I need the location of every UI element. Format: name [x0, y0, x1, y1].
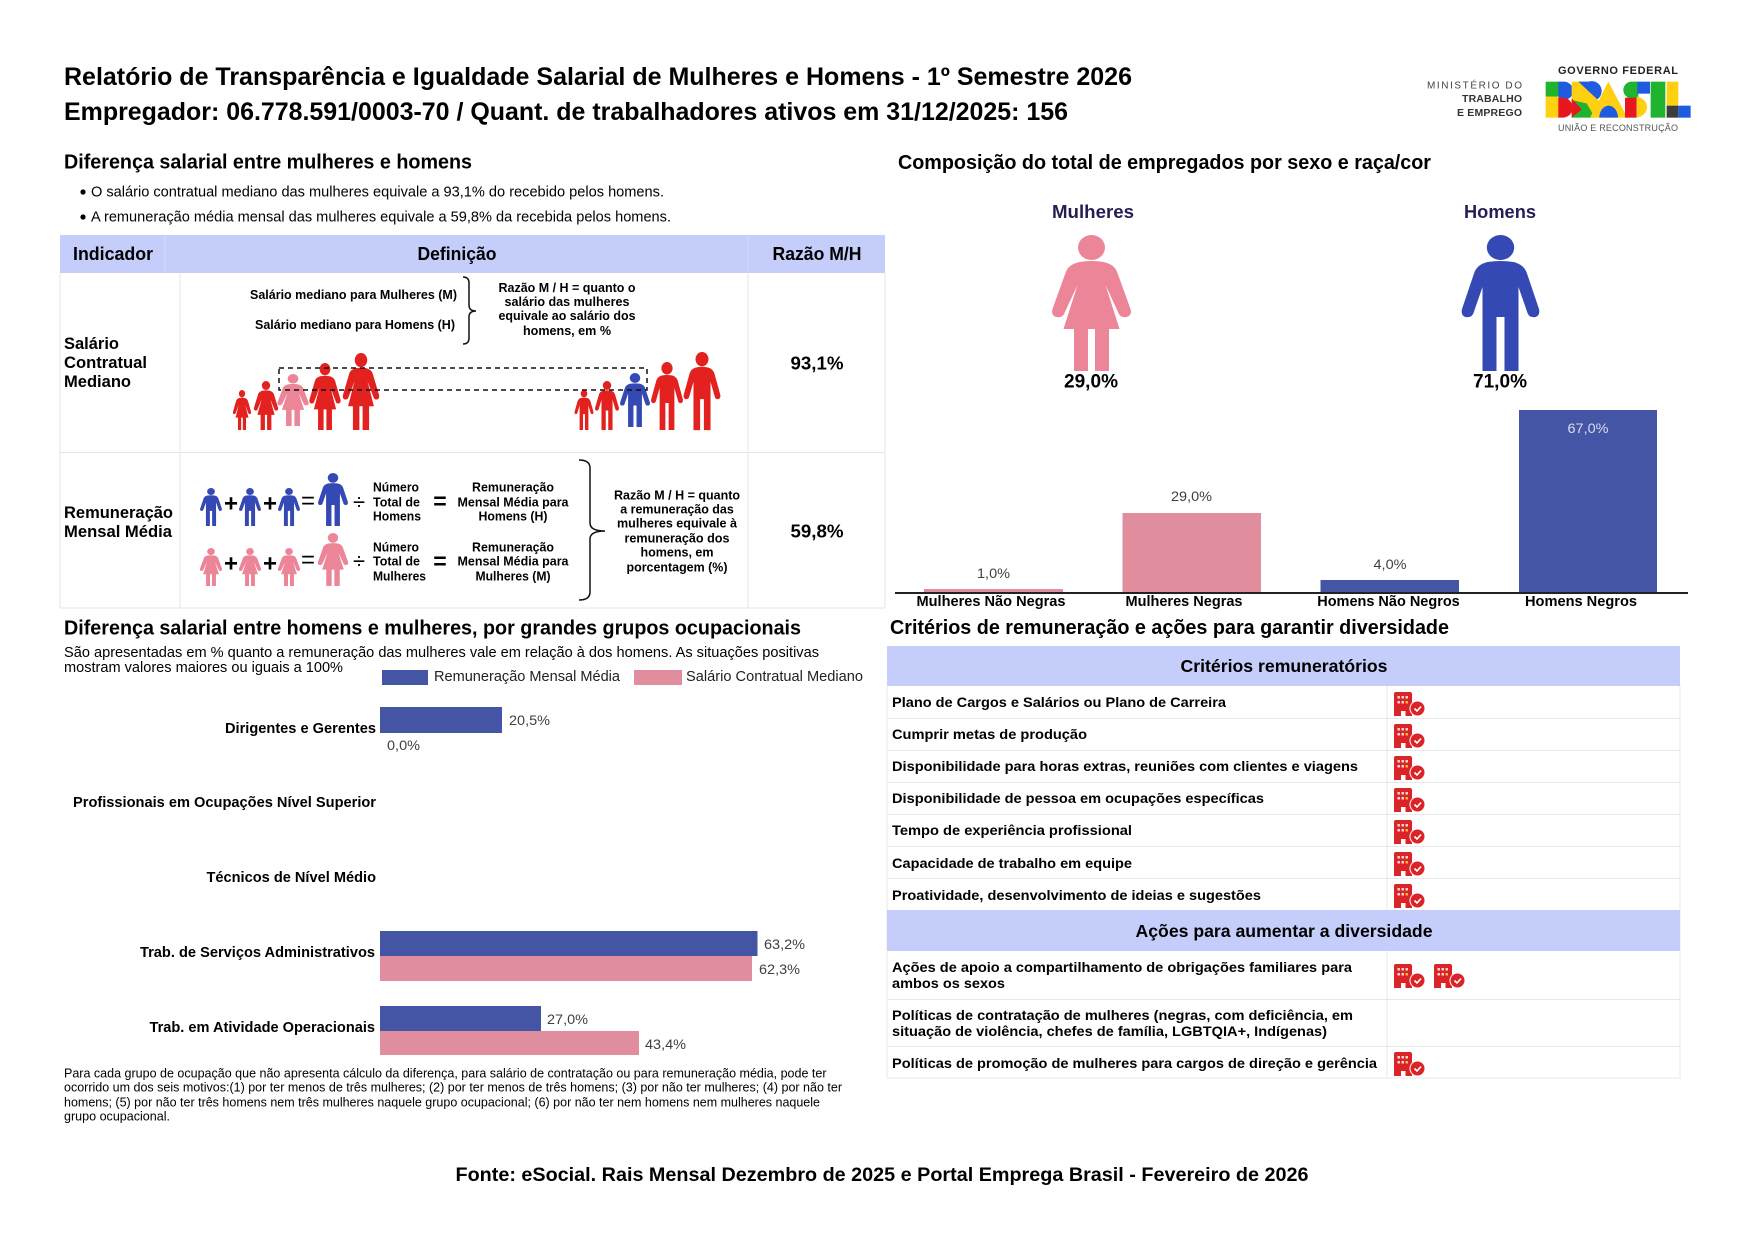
panel: mulheres [1052, 202, 1134, 392]
header: critérios remuneratórios: Critérios remuneratórios [1180, 656, 1388, 676]
text block: explicação: mostram valores maiores ou iguais a 100% [64, 660, 343, 676]
heading: composição: Composição do total de empregados por sexo e raça/cor [898, 152, 1431, 174]
row: salário contratual mediano: Salário mediano para Homens (H) [255, 318, 455, 332]
row: salário contratual mediano: Mediano [64, 373, 131, 391]
legend: Remuneração Mensal Média [434, 669, 621, 685]
formula: homens: Homens (H) [478, 508, 548, 524]
logo: ministério e governo federal: GOVERNO FEDERAL [1558, 65, 1678, 77]
row: ocupações específicas: Disponibilidade de pessoa em ocupações específicas [892, 790, 1264, 806]
formula: mulheres: Mensal Média para [458, 554, 569, 568]
formula: homens: Homens [373, 508, 421, 524]
formula: mulheres: Total de [373, 554, 420, 568]
text block: nota de rodapé: homens; (5) por não ter três homens nem três mulheres naquele grupo ocupacional; (6) por não ter nem homens nem mulheres naquele [64, 1094, 820, 1110]
formula: mulheres [200, 533, 569, 586]
header: ações para aumentar a diversidade: Ações para aumentar a diversidade [1136, 921, 1433, 941]
group: dirigentes e gerentes [225, 707, 550, 753]
row: remuneração mensal média [64, 460, 844, 600]
formula: mulheres: = [301, 546, 315, 574]
source line: Fonte: eSocial. Rais Mensal Dezembro de 2025 e Portal Emprega Brasil - Fevereiro de 2026 [456, 1164, 1309, 1186]
table header: Razão M/H [772, 244, 862, 264]
formula: mulheres: Remuneração [472, 540, 554, 554]
title [64, 63, 1132, 126]
row: metas: Cumprir metas de produção [892, 726, 1087, 742]
row: horas extras [892, 756, 1425, 780]
row: compartilhamento: Ações de apoio a compartilhamento de obrigações familiares para [892, 959, 1352, 975]
bullet list: resumo: O salário contratual mediano das mulheres equivale a 93,1% do recebido pelos homens. [91, 184, 664, 200]
formula: mulheres: + [224, 550, 238, 578]
formula: mulheres: ÷ [353, 548, 365, 574]
row: salário contratual mediano: Salário mediano para Mulheres (M) [250, 288, 457, 302]
panel: mulheres: 29,0% [1064, 372, 1118, 392]
row: plano de cargos [892, 692, 1425, 716]
bar chart: sexo e raça/cor: 4,0% [1374, 556, 1406, 572]
title: Relatório de Transparência e Igualdade Salarial de Mulheres e Homens - 1º Semestre 2026 [64, 63, 1132, 91]
row: salário contratual mediano: salário das mulheres [504, 295, 630, 309]
row: experiência: Tempo de experiência profissional [892, 822, 1132, 838]
row: remuneração mensal média: a remuneração das [620, 502, 734, 516]
row: equipe: Capacidade de trabalho em equipe [892, 855, 1132, 871]
group: atividade operacional: Trab. em Atividade Operacionais [150, 1020, 375, 1036]
row: remuneração mensal média: homens, em [640, 544, 714, 560]
legend: Salário Contratual Mediano [686, 669, 863, 685]
row: promoção: Políticas de promoção de mulheres para cargos de direção e gerência [892, 1055, 1377, 1071]
bar chart: sexo e raça/cor: Mulheres Não Negras [916, 594, 1066, 610]
row: remuneração mensal média: mulheres equivale à [617, 516, 738, 530]
bar chart: sexo e raça/cor: 67,0% [1568, 420, 1608, 436]
formula: homens [200, 473, 569, 526]
group: serviços administrativos: 63,2% [764, 936, 805, 952]
row: proatividade [892, 884, 1425, 908]
formula: mulheres: Mulheres [373, 568, 426, 584]
panel: homens: Homens [1464, 202, 1536, 222]
row: experiência [892, 820, 1425, 844]
row: remuneração mensal média: Remuneração [64, 504, 173, 522]
formula: mulheres: + [263, 550, 277, 578]
group: atividade operacional: 43,4% [645, 1036, 686, 1052]
bullet list: resumo [80, 184, 671, 226]
row: remuneração mensal média: porcentagem (%) [626, 560, 728, 574]
row: salário contratual mediano [64, 277, 844, 430]
row: ocupações específicas [892, 788, 1425, 812]
panel: homens: 71,0% [1473, 372, 1527, 392]
heading: diferença salarial: Diferença salarial entre mulheres e homens [64, 152, 472, 174]
formula: mulheres: Mulheres (M) [476, 568, 550, 584]
formula: homens: Remuneração [472, 480, 554, 494]
group: técnicos: Técnicos de Nível Médio [206, 870, 376, 886]
row: contratação: situação de violência, chefes de família, LGBTQIA+, Indígenas) [892, 1023, 1327, 1039]
formula: homens: = [301, 488, 315, 514]
row: plano de cargos: Plano de Cargos e Salários ou Plano de Carreira [892, 694, 1226, 710]
bar chart: sexo e raça/cor: 29,0% [1171, 488, 1212, 504]
formula: homens: = [433, 488, 447, 514]
text block: nota de rodapé: Para cada grupo de ocupação que não apresenta cálculo da diferença, para salário de contratação ou para remuneração média, pode ter [64, 1066, 827, 1080]
row: equipe [892, 852, 1425, 876]
heading: grupos ocupacionais: Diferença salarial entre homens e mulheres, por grandes grupos ocupacionais [64, 618, 801, 640]
group: atividade operacional [150, 1006, 686, 1055]
text block: nota de rodapé: ocorrido um dos seis motivos:(1) por ter menos de três mulheres; (2) por ter menos de três homens; (3) por não ter mulheres; (4) por não ter [64, 1080, 843, 1094]
logo: ministério e governo federal: MINISTÉRIO DO [1427, 78, 1522, 92]
text block: nota de rodapé [64, 1066, 843, 1124]
table header: Indicador [73, 244, 153, 264]
group: serviços administrativos: Trab. de Serviços Administrativos [140, 945, 375, 961]
title: Empregador: 06.778.591/0003-70 / Quant. de trabalhadores ativos em 31/12/2025: 156 [64, 98, 1068, 126]
group: dirigentes e gerentes: 0,0% [387, 737, 420, 753]
row: remuneração mensal média: Razão M / H = quanto [614, 488, 740, 502]
table header [60, 235, 885, 273]
logo: ministério e governo federal [1427, 65, 1691, 133]
row: remuneração mensal média: remuneração dos [624, 530, 730, 546]
row: compartilhamento: ambos os sexos [892, 975, 1005, 991]
group: profissionais: Profissionais em Ocupações Nível Superior [73, 795, 376, 811]
bar chart: sexo e raça/cor: 1,0% [977, 565, 1010, 581]
group: serviços administrativos: 62,3% [759, 961, 800, 977]
group: dirigentes e gerentes: 20,5% [509, 712, 550, 728]
row: horas extras: Disponibilidade para horas extras, reuniões com clientes e viagens [892, 758, 1358, 774]
header: critérios remuneratórios [887, 646, 1680, 686]
row: compartilhamento [892, 959, 1465, 991]
logo: ministério e governo federal: TRABALHO [1462, 93, 1522, 105]
row: salário contratual mediano: 93,1% [790, 352, 844, 374]
row: remuneração mensal média: 59,8% [790, 520, 844, 542]
bar chart: sexo e raça/cor: Homens Não Negros [1317, 594, 1460, 610]
formula: homens: Número [373, 480, 419, 494]
row: salário contratual mediano: Razão M / H = quanto o [498, 281, 636, 295]
formula: mulheres: = [433, 548, 447, 574]
row: promoção [892, 1052, 1425, 1076]
row: contratação [892, 1007, 1353, 1039]
formula: homens: Total de [373, 494, 420, 510]
group: atividade operacional: 27,0% [547, 1011, 588, 1027]
panel: mulheres: Mulheres [1052, 202, 1134, 222]
formula: homens: + [263, 490, 277, 518]
text block: explicação: São apresentadas em % quanto a remuneração das mulheres vale em relação à dos homens. As situações positivas [64, 645, 819, 661]
row: proatividade: Proatividade, desenvolvimento de ideias e sugestões [892, 887, 1261, 903]
icons: mulheres e homens ordenados [233, 352, 720, 430]
table header: Definição [418, 244, 496, 264]
icon: homem [1462, 235, 1539, 371]
group: dirigentes e gerentes: Dirigentes e Gerentes [225, 721, 376, 737]
row: salário contratual mediano: Salário [64, 335, 119, 353]
panel: tabela critérios e ações [887, 646, 1680, 1078]
panel: tabela indicadores [60, 235, 885, 608]
text block: explicação [64, 645, 819, 676]
row: salário contratual mediano: homens, em % [523, 324, 611, 338]
header: ações para aumentar a diversidade [887, 910, 1680, 951]
panel: homens [1462, 202, 1539, 392]
row: remuneração mensal média: Mensal Média [64, 523, 173, 541]
legend [382, 669, 863, 685]
row: salário contratual mediano: equivale ao salário dos [498, 309, 636, 323]
formula: homens: Mensal Média para [458, 494, 569, 510]
formula: homens: ÷ [353, 490, 365, 514]
row: contratação: Políticas de contratação de mulheres (negras, com deficiência, em [892, 1007, 1353, 1023]
formula: mulheres: Número [373, 540, 419, 554]
logo: ministério e governo federal: UNIÃO E RECONSTRUÇÃO [1558, 123, 1678, 133]
bar chart: sexo e raça/cor: Mulheres Negras [1126, 594, 1242, 610]
icon: mulher [1052, 235, 1131, 371]
formula: homens: + [224, 490, 238, 518]
heading: critérios: Critérios de remuneração e ações para garantir diversidade [890, 617, 1449, 639]
logo: ministério e governo federal: E EMPREGO [1457, 107, 1522, 119]
row: metas [892, 724, 1425, 748]
bullet list: resumo: A remuneração média mensal das mulheres equivale a 59,8% da recebida pelos homens. [91, 208, 671, 226]
row: salário contratual mediano: Contratual [64, 354, 147, 372]
bar chart: sexo e raça/cor: Homens Negros [1525, 594, 1637, 610]
text block: nota de rodapé: grupo ocupacional. [64, 1108, 170, 1124]
group: serviços administrativos [140, 931, 805, 981]
bar chart: sexo e raça/cor [895, 410, 1688, 610]
bar chart: grupos ocupacionais [73, 707, 805, 1055]
